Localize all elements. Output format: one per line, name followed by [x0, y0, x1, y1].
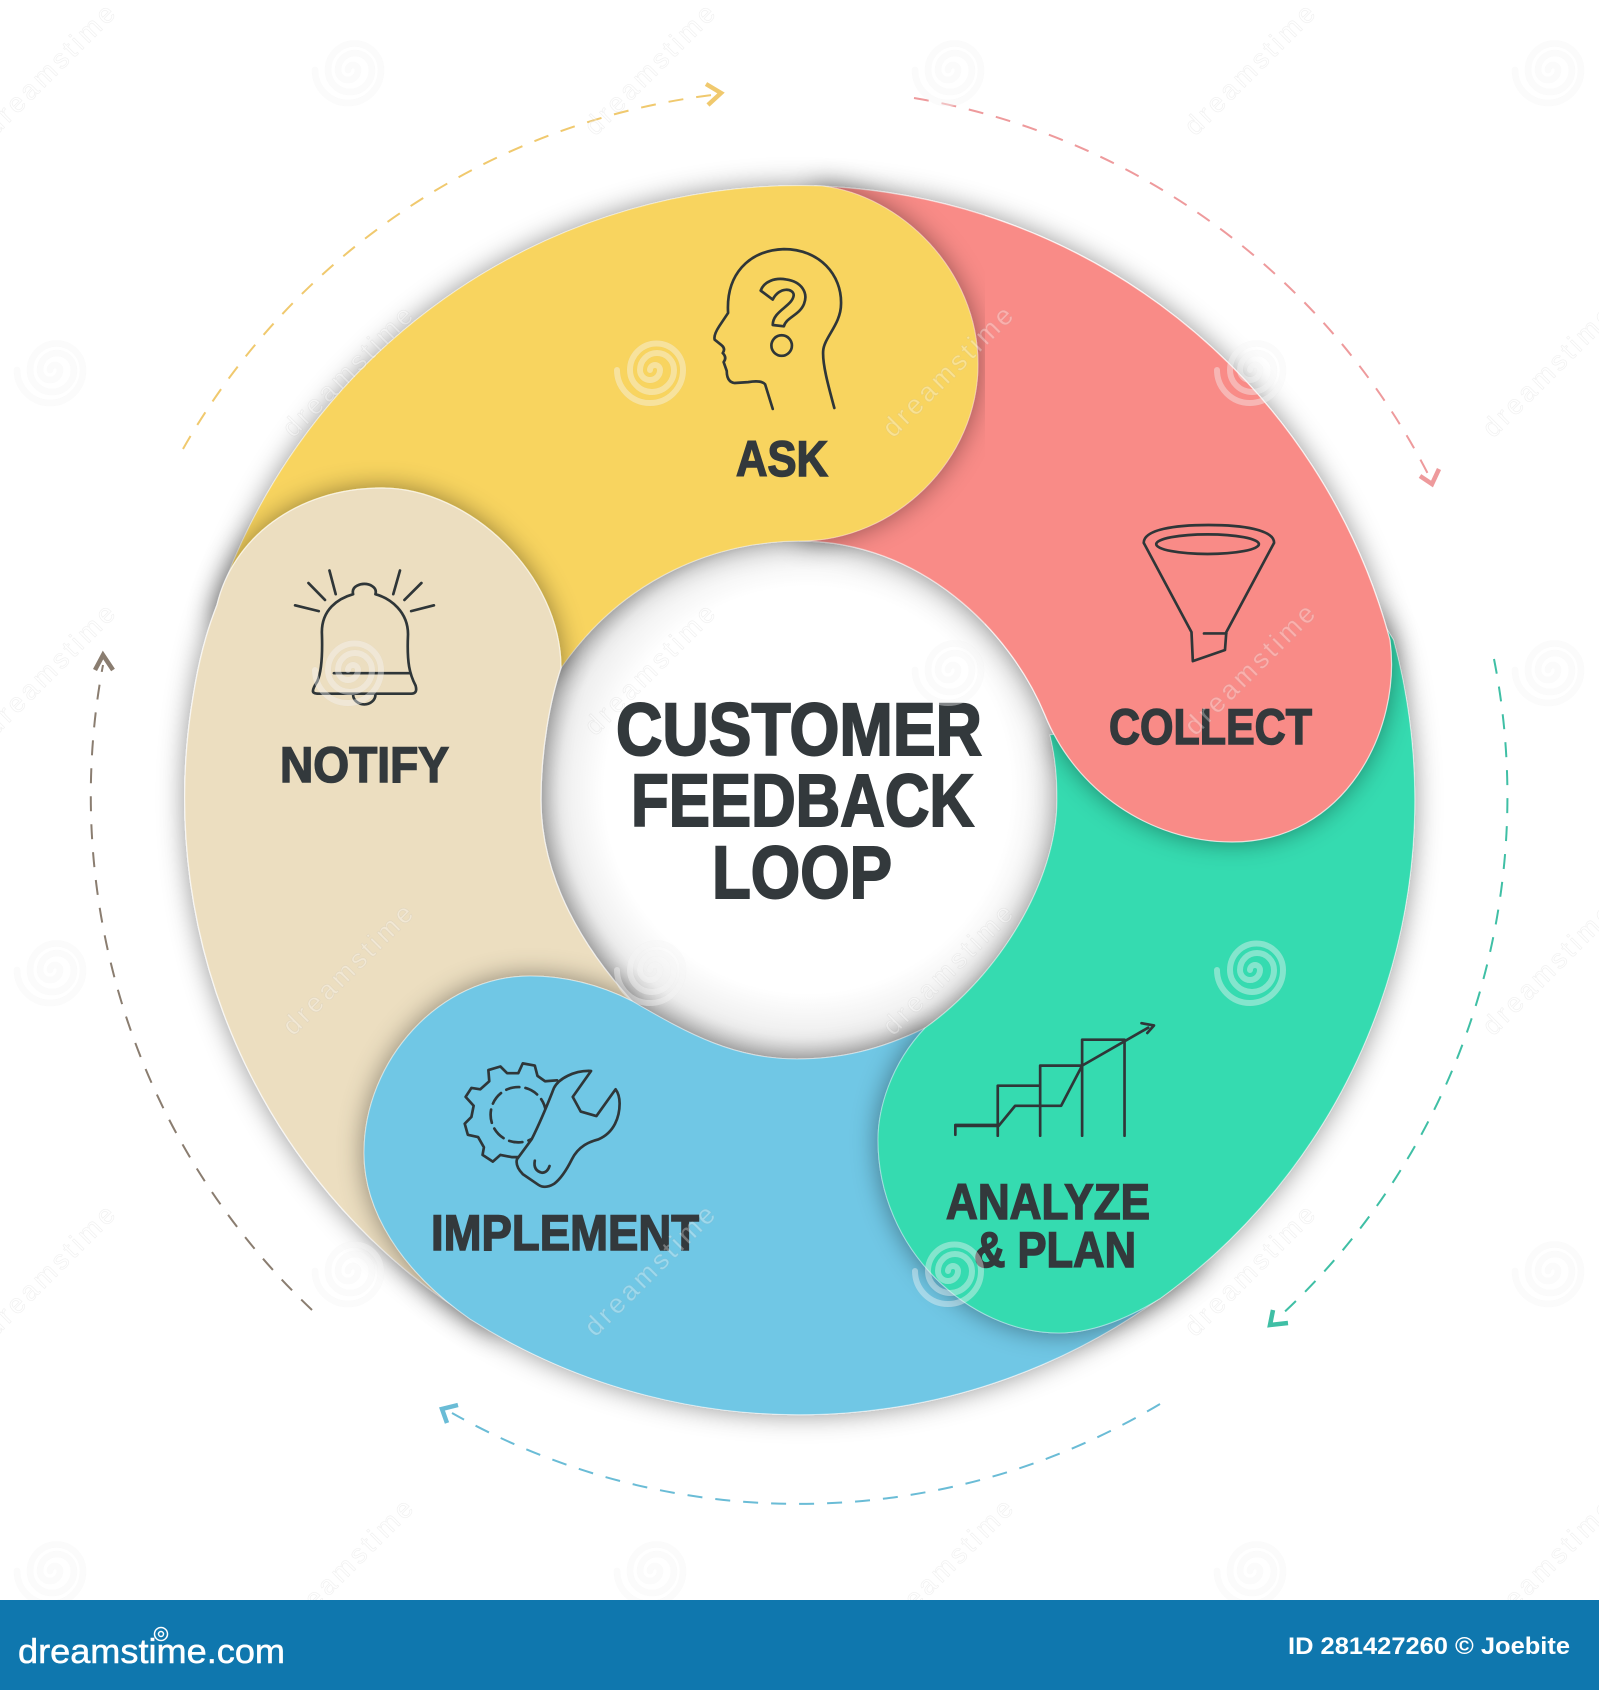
- title: [616, 688, 982, 914]
- watermark: diagonal text: dreamstime: [276, 1493, 419, 1636]
- icon: funnel: [1144, 525, 1274, 661]
- label: analyze and plan: ANALYZE: [946, 1174, 1150, 1230]
- panel: collect head: [985, 215, 1406, 858]
- panel: collect body: [800, 186, 1392, 842]
- banner image id: ID 281427260 © Joebite: [1288, 1633, 1570, 1660]
- title: CUSTOMER: [616, 688, 982, 771]
- panel: analyze and plan: [878, 610, 1415, 1333]
- title: LOOP: [712, 831, 892, 914]
- icon: head with question mark: [714, 249, 841, 409]
- footer banner: [0, 1600, 1599, 1690]
- watermark: diagonal text: dreamstime: [1178, 598, 1321, 741]
- label: analyze and plan: & PLAN: [974, 1222, 1136, 1278]
- icon: gear and wrench: [465, 1063, 620, 1187]
- watermark: diagonal text: dreamstime: [876, 300, 1019, 443]
- panel: ask: [212, 186, 978, 700]
- watermark: diagonal text: dreamstime: [578, 1199, 721, 1342]
- icon: bell: [295, 571, 434, 704]
- watermark: diagonal text: dreamstime: [276, 300, 419, 443]
- label: ask: ASK: [736, 431, 828, 487]
- arrow: red dashed arc: [914, 98, 1439, 484]
- arrow: brown dashed arc: [91, 655, 312, 1310]
- watermark: diagonal text: dreamstime: [876, 898, 1019, 1041]
- label: analyze and plan: [946, 1174, 1150, 1278]
- arrow: green dashed arc: [1270, 659, 1507, 1325]
- title: FEEDBACK: [631, 759, 974, 842]
- watermark: diagonal text: dreamstime: [1178, 1199, 1321, 1342]
- icon: rising step chart: [955, 1023, 1154, 1136]
- banner spiral mark: [154, 1628, 168, 1640]
- watermark: diagonal text: dreamstime: [876, 1493, 1019, 1636]
- watermark: diagonal text: dreamstime: [1178, 0, 1321, 141]
- panel: implement: [364, 976, 1205, 1415]
- label: implement: IMPLEMENT: [431, 1205, 699, 1261]
- watermark: diagonal text: dreamstime: [276, 898, 419, 1041]
- arrow: yellow dashed arc: [183, 84, 721, 449]
- watermark: diagonal text: dreamstime: [578, 598, 721, 741]
- watermark: diagonal text: dreamstime: [578, 0, 721, 141]
- banner logo text: dreamstime.com: [18, 1633, 285, 1671]
- arrow: blue dashed arc: [442, 1404, 1160, 1504]
- label: collect: COLLECT: [1109, 699, 1312, 755]
- center hole shading: [523, 525, 1073, 1075]
- panel: notify: [185, 488, 632, 1335]
- label: notify: NOTIFY: [280, 737, 449, 793]
